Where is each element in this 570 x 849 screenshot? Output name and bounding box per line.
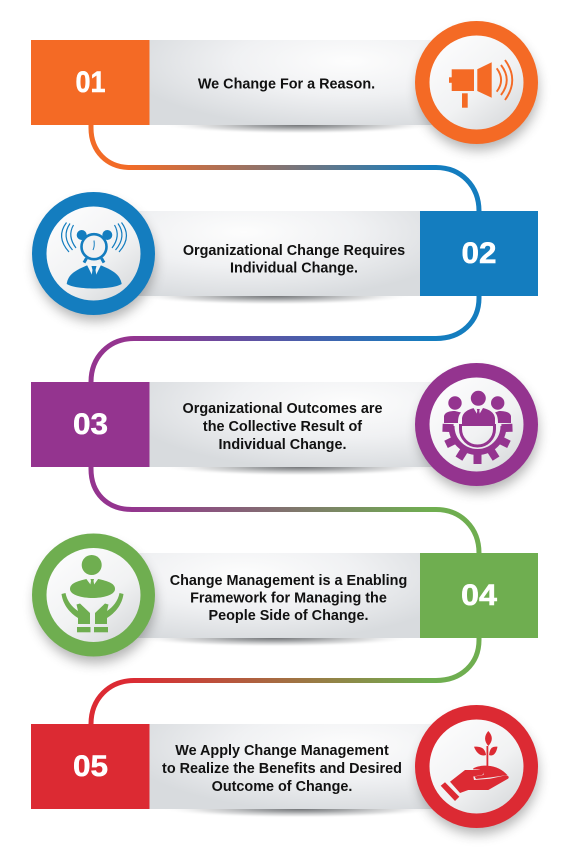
icon circle: hand holding plant — [415, 705, 538, 834]
text 01: We Change For a Reason. — [198, 76, 375, 92]
number 04: 04 — [461, 579, 497, 612]
panel: step 05 — [31, 705, 538, 834]
text 03: the Collective Result of — [203, 419, 362, 435]
text bar 04 — [136, 553, 420, 638]
text 02: Organizational Change Requires — [183, 243, 405, 259]
icon circle: megaphone — [415, 21, 538, 150]
number 05: 05 — [73, 750, 108, 783]
connector 03 to 04 — [91, 467, 479, 553]
text 05: We Apply Change Management — [175, 743, 389, 759]
panel: step 02 — [32, 192, 538, 321]
text bar 02 — [136, 211, 420, 296]
text 04: People Side of Change. — [209, 608, 368, 624]
bar shadow 03 — [160, 458, 440, 476]
text 03 — [183, 401, 382, 453]
number 02: 02 — [462, 237, 496, 270]
panel: step 04 — [32, 534, 538, 663]
number box 05 — [31, 724, 150, 809]
text 02: Individual Change. — [230, 260, 358, 276]
bar shadow 05 — [160, 800, 440, 818]
number 01: 01 — [76, 66, 106, 99]
text 05: to Realize the Benefits and Desired — [162, 761, 402, 777]
bar shadow 04 — [134, 629, 414, 647]
text bar 05 — [149, 724, 434, 809]
text 02 — [183, 243, 405, 276]
text 04 — [170, 573, 407, 624]
text 04: Framework for Managing the — [190, 590, 387, 606]
icon circle: alarm clock person — [32, 192, 155, 321]
bar shadow 02 — [134, 287, 414, 305]
number 03: 03 — [73, 408, 108, 441]
number box 04 — [420, 553, 538, 638]
text 03: Individual Change. — [219, 437, 346, 453]
text 05: Outcome of Change. — [212, 779, 352, 795]
connector 01 to 02 — [91, 125, 479, 211]
number box 01 — [31, 40, 150, 125]
panel: step 01 — [31, 21, 538, 150]
text 03: Organizational Outcomes are — [183, 401, 382, 417]
number box 03 — [31, 382, 150, 467]
connector 02 to 03 — [91, 296, 479, 382]
panel: step 03 — [31, 363, 538, 492]
icon circle: team and gear — [415, 363, 538, 492]
text bar 03 — [149, 382, 434, 467]
text bar 01 — [149, 40, 434, 125]
text 05 — [162, 743, 402, 795]
bar shadow 01 — [160, 116, 440, 134]
number box 02 — [420, 211, 538, 296]
text 04: Change Management is a Enabling — [170, 573, 407, 589]
icon circle: person held in hands — [32, 534, 155, 663]
connector 04 to 05 — [91, 638, 479, 724]
